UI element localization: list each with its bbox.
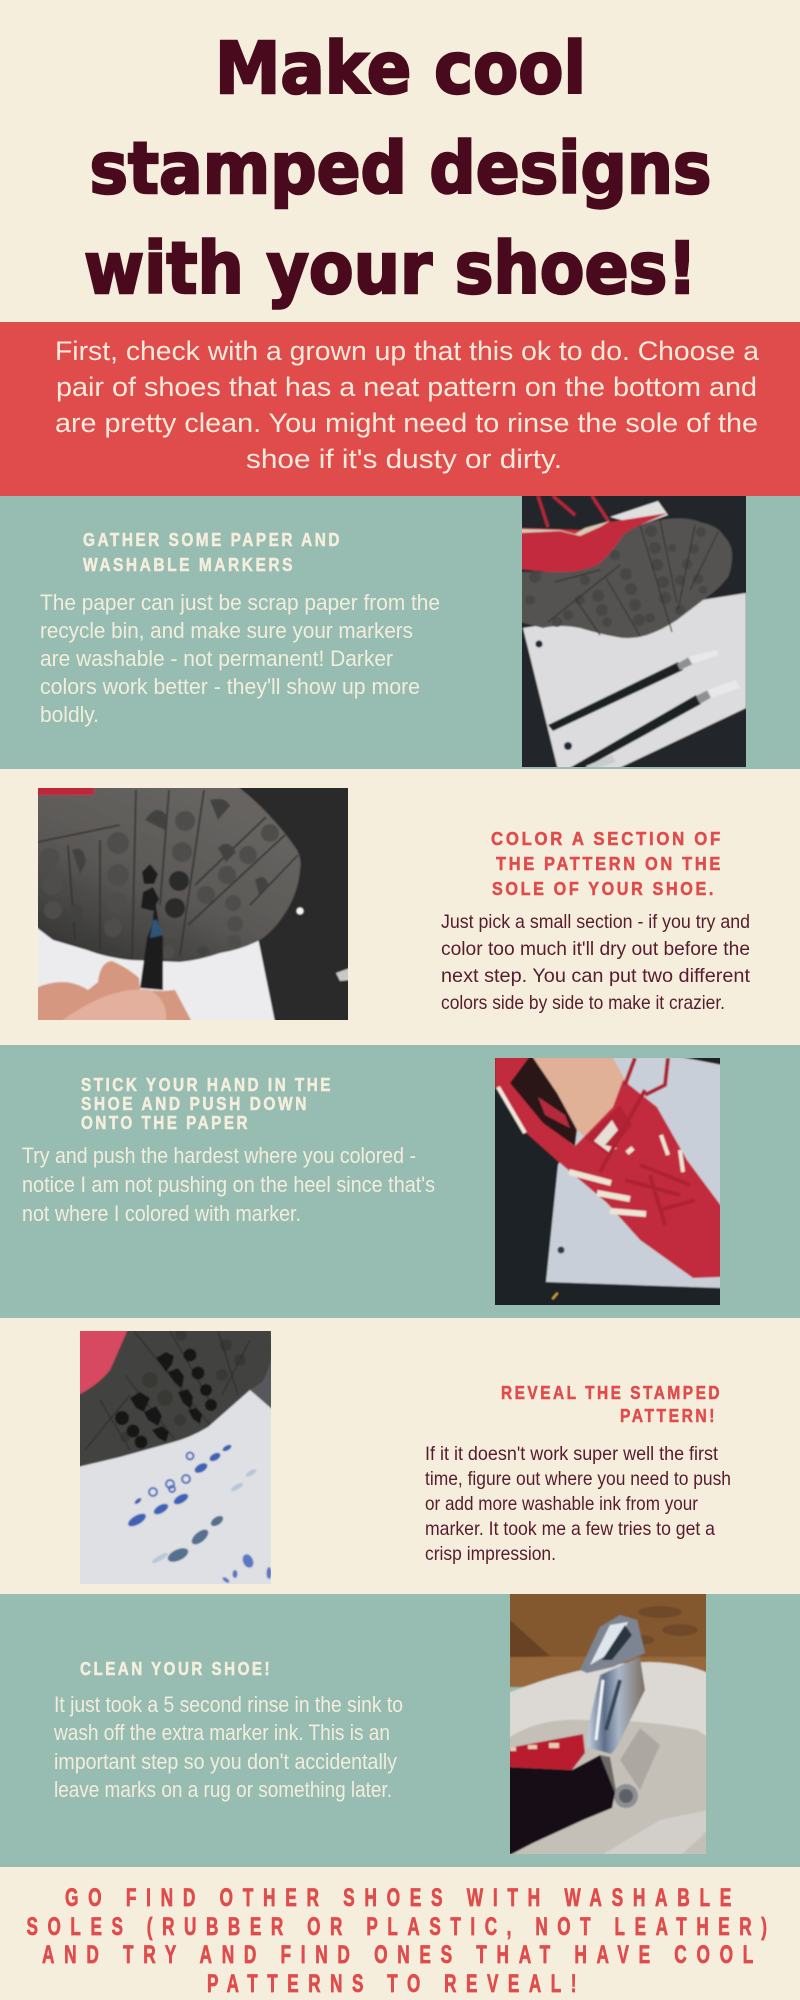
- photo: stamped pattern on paper: [78, 1329, 273, 1586]
- photo: rinsing shoe in sink: [508, 1592, 708, 1856]
- panel: step 2 color the sole: [38, 788, 750, 1020]
- heading: step 3: [81, 1074, 333, 1133]
- title: Make cool: [215, 27, 586, 110]
- closing call to action: [26, 1884, 776, 1998]
- text block: step 5: leave marks on a rug or something later.: [54, 1777, 392, 1802]
- text block: step 2: next step. You can put two different: [441, 965, 751, 987]
- heading: step 3: SHOE AND PUSH DOWN: [81, 1093, 309, 1114]
- text block: step 2: colors side by side to make it crazier.: [441, 992, 725, 1014]
- title: stamped designs: [90, 127, 712, 210]
- text block: step 1: The paper can just be scrap paper from the: [40, 590, 440, 615]
- heading: step 4: REVEAL THE STAMPED: [501, 1382, 722, 1403]
- panel: step 5 clean shoe: [0, 1592, 800, 1867]
- text block: step 1: are washable - not permanent! Darker: [40, 646, 393, 671]
- panel: step 3 push down: [0, 1045, 800, 1318]
- panel: intro: [0, 322, 800, 496]
- heading: step 3: STICK YOUR HAND IN THE: [81, 1074, 333, 1095]
- text block: step 5: wash off the extra marker ink. This is an: [53, 1720, 390, 1745]
- text block: step 1: [40, 590, 440, 727]
- text block: step 5: It just took a 5 second rinse in the sink to: [54, 1692, 403, 1717]
- title: [84, 27, 712, 310]
- heading: step 2: SOLE OF YOUR SHOE.: [492, 878, 716, 899]
- heading: step 1: [83, 529, 342, 575]
- heading: step 3: ONTO THE PAPER: [81, 1112, 250, 1133]
- heading: step 4: PATTERN!: [620, 1405, 717, 1426]
- text block: step 4: crisp impression.: [425, 1543, 556, 1565]
- heading: step 4: [501, 1382, 722, 1426]
- photo: hand in shoe pushing on paper: [493, 1056, 722, 1307]
- panel: step 1 gather supplies: [0, 494, 800, 775]
- panel: intro: shoe if it's dusty or dirty.: [246, 444, 562, 474]
- text block: step 4: time, figure out where you need to push: [425, 1468, 731, 1490]
- text block: step 3: notice I am not pushing on the heel since that's: [22, 1172, 435, 1197]
- text block: step 3: not where I colored with marker.: [22, 1201, 301, 1226]
- heading: step 1: GATHER SOME PAPER AND: [83, 529, 342, 550]
- text block: step 3: [22, 1143, 435, 1226]
- text block: step 5: [53, 1692, 403, 1802]
- heading: step 2: THE PATTERN ON THE: [496, 853, 723, 874]
- panel: intro: First, check with a grown up that this ok to do. Choose a: [55, 336, 760, 366]
- text block: step 2: color too much it'll dry out before the: [441, 938, 750, 960]
- title: with your shoes!: [84, 227, 697, 310]
- heading: step 2: [491, 828, 723, 899]
- text block: step 4: If it it doesn't work super well the first: [425, 1443, 719, 1465]
- text block: step 4: [425, 1443, 731, 1565]
- panel: intro: pair of shoes that has a neat pattern on the bottom and: [56, 372, 757, 402]
- heading: step 5: CLEAN YOUR SHOE!: [80, 1658, 272, 1679]
- text block: step 4: or add more washable ink from your: [425, 1493, 698, 1515]
- text block: step 2: Just pick a small section - if you try and: [441, 911, 750, 933]
- panel: step 4 reveal: [80, 1331, 730, 1584]
- text block: step 1: colors work better - they'll show up more: [40, 674, 420, 699]
- photo: coloring the sole with a marker: [36, 786, 350, 1022]
- photo: shoe sole and markers on paper: [520, 494, 748, 775]
- text block: step 1: boldly.: [40, 702, 99, 727]
- closing call to action: PATTERNS TO REVEAL!: [207, 1970, 586, 1998]
- panel: intro: are pretty clean. You might need to rinse the sole of the: [55, 408, 758, 438]
- text block: step 1: recycle bin, and make sure your markers: [40, 618, 413, 643]
- text block: step 5: important step so you don't accidentally: [54, 1749, 397, 1774]
- text block: step 4: marker. It took me a few tries to get a: [425, 1518, 715, 1540]
- text block: step 3: Try and push the hardest where you colored -: [22, 1143, 416, 1168]
- heading: step 2: COLOR A SECTION OF: [491, 828, 723, 849]
- text block: step 2: [441, 911, 751, 1014]
- heading: step 1: WASHABLE MARKERS: [83, 554, 295, 575]
